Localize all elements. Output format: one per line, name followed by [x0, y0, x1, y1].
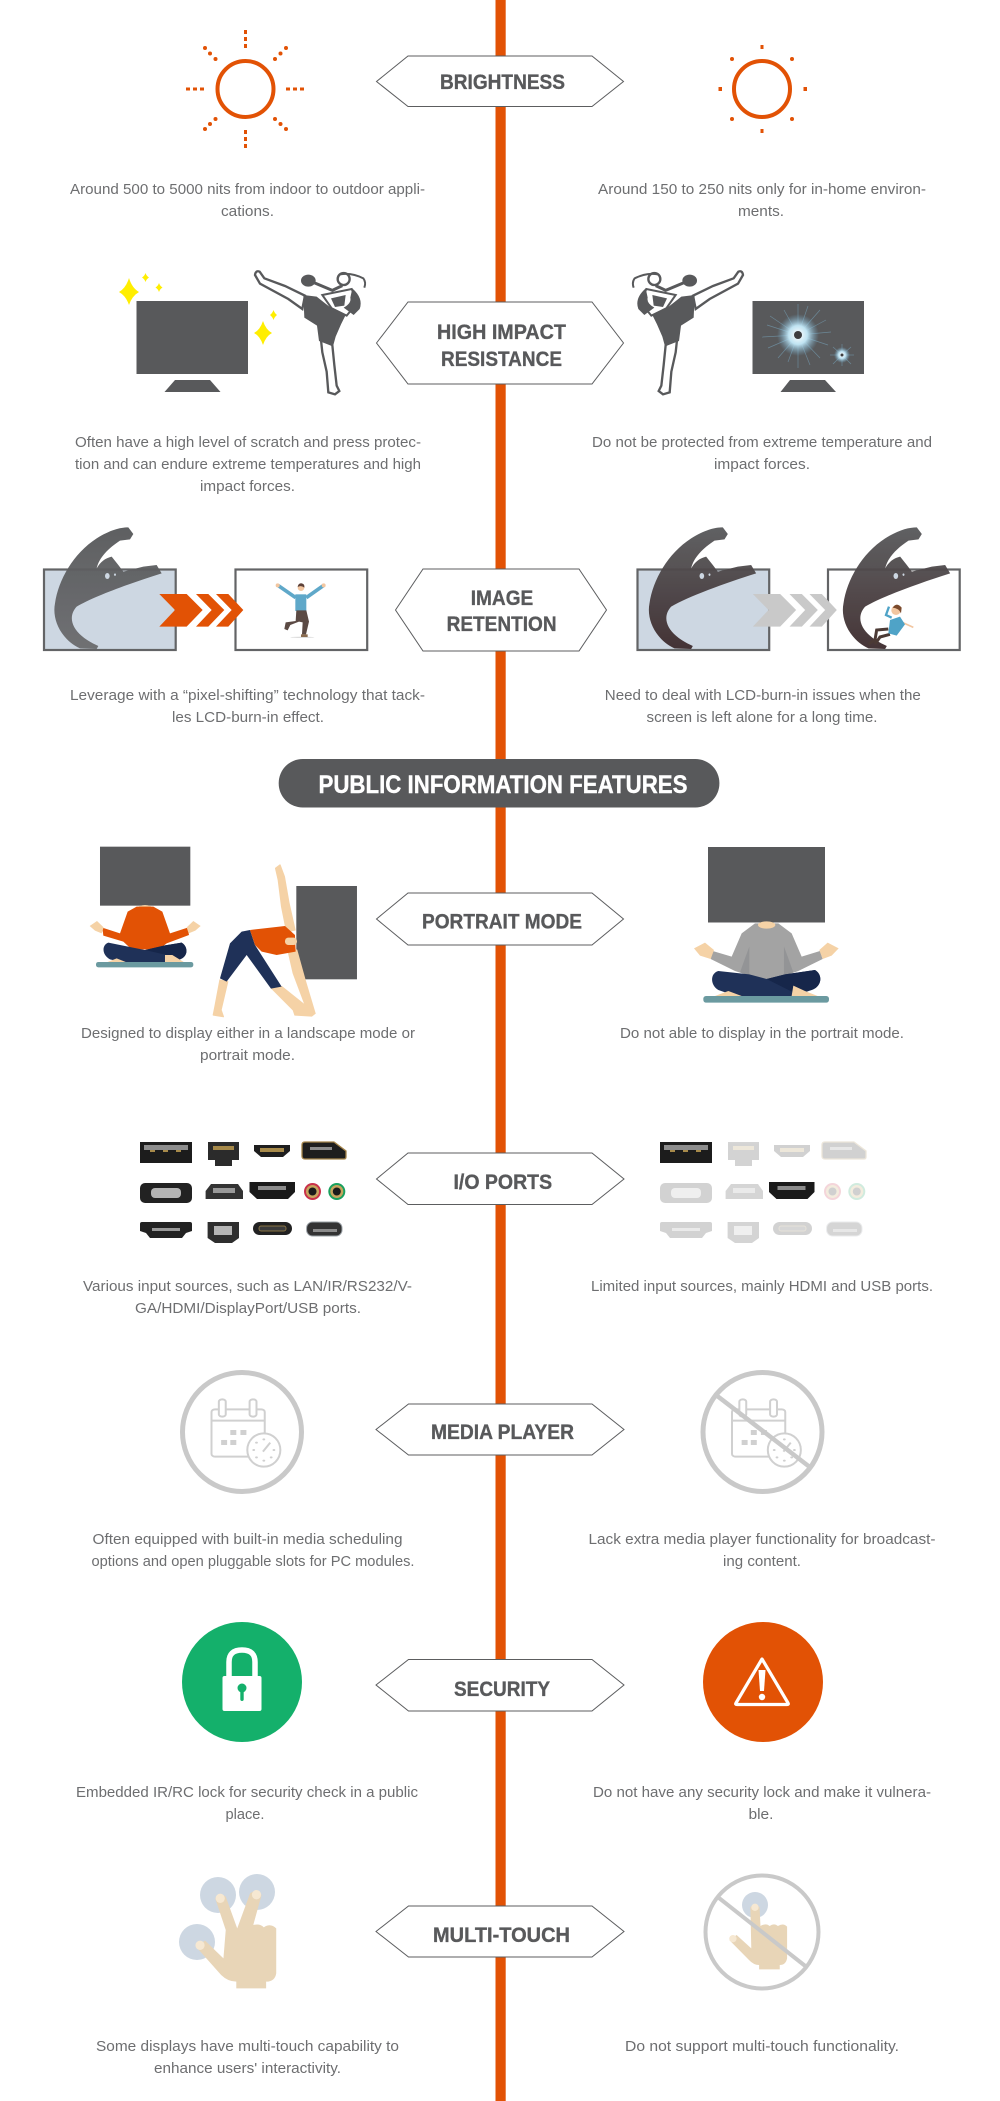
text: retention left: Leverage with a “pixel-shifting” technology that tack- — [70, 688, 425, 704]
section: security — [76, 1622, 931, 1823]
heading: public information features — [279, 759, 719, 808]
text: ports left: Various input sources, such as LAN/IR/RS232/V- — [83, 1279, 412, 1295]
label: media player — [376, 1404, 624, 1455]
text: multi-touch left: Some displays have multi-touch capability to — [96, 2039, 399, 2055]
label: portrait mode — [376, 893, 624, 945]
icon: many ports — [140, 1142, 346, 1243]
label: multi-touch — [376, 1906, 624, 1957]
text: multi-touch right: Do not support multi-touch functionality. — [625, 2039, 899, 2055]
text: retention right: screen is left alone for a long time. — [646, 710, 878, 726]
center divider bar — [496, 0, 506, 2101]
label: security: SECURITY — [454, 1678, 550, 1701]
icon: green lock — [182, 1622, 302, 1742]
text: media right: ing content. — [723, 1554, 801, 1570]
section: portrait mode — [81, 847, 904, 1064]
icon: warning — [703, 1622, 823, 1742]
text: media right: Lack extra media player functionality for broadcast- — [588, 1532, 936, 1548]
icon: no multi-touch — [706, 1876, 818, 1988]
label: image retention: IMAGE — [471, 587, 533, 610]
section: multi-touch — [96, 1874, 899, 2077]
text: impact right: Do not be protected from extreme temperature and — [592, 435, 932, 451]
text: impact left: impact forces. — [200, 479, 295, 495]
icon: burn-in screens — [638, 527, 960, 650]
text: retention left: les LCD-burn-in effect. — [172, 710, 324, 726]
text: portrait left: portrait mode. — [200, 1048, 295, 1064]
icon: monitor with sparkles and fighter — [119, 271, 365, 394]
heading: public information features: PUBLIC INFORMATION FEATURES — [318, 771, 688, 799]
label: portrait mode: PORTRAIT MODE — [422, 911, 582, 934]
icon: falling man — [868, 605, 913, 644]
text: multi-touch left: enhance users' interactivity. — [154, 2061, 341, 2077]
text: impact left: Often have a high level of scratch and press protec- — [75, 435, 421, 451]
icon: limited ports — [660, 1142, 866, 1243]
text: brightness right: ments. — [738, 204, 784, 220]
label: brightness: BRIGHTNESS — [440, 71, 565, 94]
section: image retention — [44, 527, 960, 726]
label: high impact resistance: HIGH IMPACT — [437, 321, 566, 344]
label: i/o ports — [376, 1153, 624, 1204]
label: brightness — [376, 56, 624, 106]
text: brightness left: cations. — [221, 204, 274, 220]
icon: landscape and portrait yoga people — [90, 847, 357, 1017]
icon: multi-touch hand — [179, 1874, 276, 1988]
label: high impact resistance: RESISTANCE — [441, 348, 562, 371]
text: impact left: tion and can endure extreme temperatures and high — [75, 457, 421, 473]
label: media player: MEDIA PLAYER — [431, 1421, 574, 1444]
label: multi-touch: MULTI-TOUCH — [433, 1924, 570, 1947]
icon: bright sun — [186, 30, 306, 149]
text: security left: Embedded IR/RC lock for security check in a public — [76, 1785, 418, 1801]
section: high impact resistance — [75, 271, 932, 495]
text: brightness right: Around 150 to 250 nits only for in-home environ- — [598, 182, 926, 198]
section: media player — [92, 1372, 936, 1570]
label: image retention — [396, 569, 606, 651]
text: security right: ble. — [748, 1807, 774, 1823]
label: i/o ports: I/O PORTS — [454, 1171, 552, 1194]
label: high impact resistance — [376, 302, 624, 384]
icon: portrait monitor with seated person — [694, 847, 839, 1003]
text: media left: Often equipped with built-in media scheduling — [92, 1532, 402, 1548]
label: security — [376, 1660, 624, 1711]
text: media left: options and open pluggable slots for PC modules. — [92, 1554, 414, 1570]
icon: dim sun — [718, 45, 807, 133]
text: brightness left: Around 500 to 5000 nits from indoor to outdoor appli- — [70, 182, 425, 198]
label: image retention: RETENTION — [447, 613, 557, 636]
text: security right: Do not have any security lock and make it vulnera- — [593, 1785, 931, 1801]
text: portrait right: Do not able to display in the portrait mode. — [620, 1026, 904, 1042]
section: i/o ports — [83, 1142, 933, 1317]
section: brightness — [70, 30, 926, 220]
text: security left: place. — [226, 1807, 264, 1823]
icon: standing man — [276, 583, 326, 638]
icon: pixel shifting screens — [44, 527, 367, 650]
icon: schedule — [182, 1372, 302, 1492]
text: retention right: Need to deal with LCD-burn-in issues when the — [605, 688, 921, 704]
icon: fighter and cracked monitor — [633, 271, 864, 394]
text: portrait left: Designed to display either in a landscape mode or — [81, 1026, 415, 1042]
text: impact right: impact forces. — [714, 457, 810, 473]
icon: schedule crossed out — [703, 1372, 822, 1492]
text: ports left: GA/HDMI/DisplayPort/USB ports. — [135, 1301, 361, 1317]
text: ports right: Limited input sources, mainly HDMI and USB ports. — [591, 1279, 933, 1295]
